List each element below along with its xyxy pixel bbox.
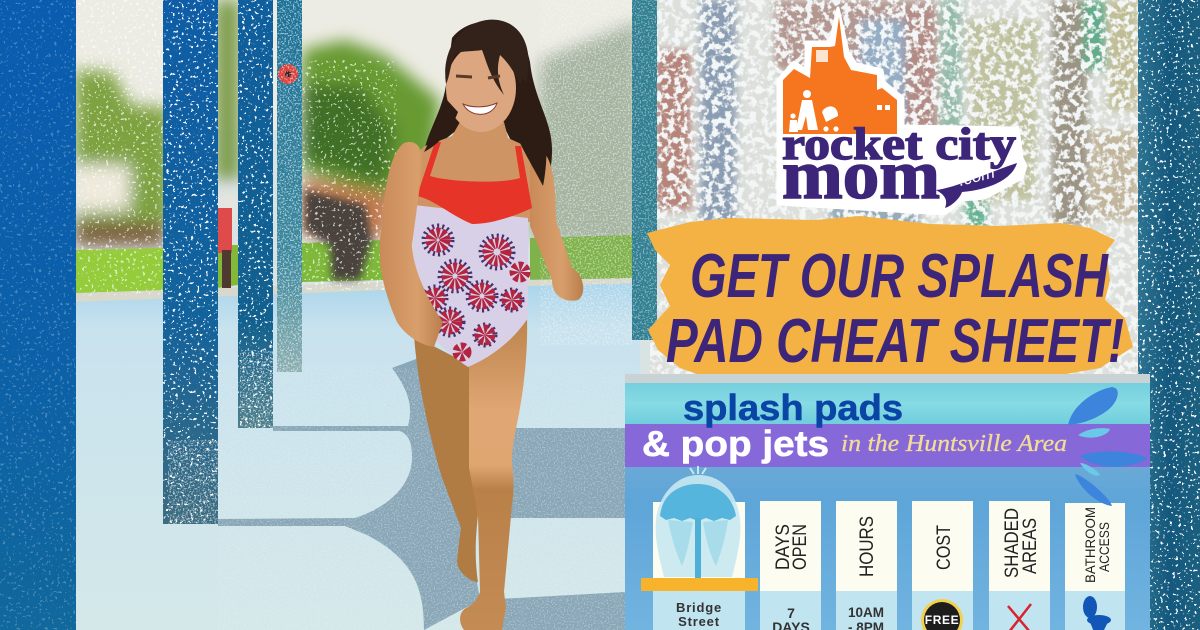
logo swoosh	[936, 163, 1017, 208]
column: cost: COST	[934, 525, 955, 570]
eyes	[456, 76, 500, 78]
logo wordmark mom: mom	[782, 137, 940, 214]
column: hours: HOURS	[857, 516, 878, 577]
face	[446, 44, 516, 132]
far leg	[414, 336, 478, 582]
column: location	[653, 502, 745, 630]
column: days open	[760, 501, 821, 630]
column: location: Bridge	[676, 600, 722, 615]
column: days open: OPEN	[790, 524, 811, 570]
column: bathroom access	[1065, 503, 1125, 630]
hair strands over shoulder	[424, 78, 546, 186]
front hair	[445, 20, 529, 95]
teal pole centre	[632, 0, 657, 340]
logo white outline	[778, 8, 1026, 214]
column: days open: 7	[787, 605, 795, 621]
grass	[76, 248, 165, 296]
background people group	[305, 190, 372, 280]
chest and shoulders	[408, 122, 542, 222]
family silhouette	[789, 50, 890, 132]
orange paint brush stroke	[647, 216, 1133, 375]
water splash drops	[1068, 387, 1148, 506]
column: shaded areas	[989, 501, 1050, 630]
left arm and hand	[380, 142, 443, 347]
smile	[463, 103, 497, 114]
purple title band	[625, 424, 1150, 467]
column: cost: FREE	[925, 613, 959, 627]
title splash pads: splash pads	[683, 387, 903, 428]
pavement shadow	[218, 350, 480, 630]
blue pole far left	[0, 0, 76, 630]
girl running	[380, 20, 583, 630]
near leg	[460, 318, 527, 630]
subtitle: in the Huntsville Area	[841, 431, 1067, 457]
pavement	[76, 280, 640, 630]
right arm	[530, 148, 583, 301]
turquoise title band	[625, 383, 1150, 425]
back hair	[424, 22, 552, 186]
fountain icon	[641, 466, 758, 591]
blue pole 3	[277, 0, 302, 372]
blue pole 2	[238, 0, 273, 428]
orange skyline	[783, 17, 897, 134]
title pop jets: & pop jets	[642, 423, 829, 464]
card background	[625, 374, 1150, 630]
swimsuit floral body	[412, 205, 528, 367]
cheat sheet card	[625, 374, 1150, 630]
column: location: Street	[678, 614, 720, 629]
headline	[666, 242, 1124, 376]
background person in red	[218, 208, 232, 288]
swimsuit floral bursts	[424, 226, 525, 356]
column: bathroom access: BATHROOM	[1082, 507, 1098, 583]
mottled splash curtain	[650, 0, 1140, 375]
column: hours	[836, 501, 897, 630]
column: cost	[912, 501, 973, 630]
red ruffle	[417, 142, 532, 224]
blue pole 1	[163, 0, 218, 524]
card top strip	[625, 374, 1150, 384]
column: days open: DAYS	[773, 524, 794, 570]
teal pole far right	[1138, 0, 1200, 630]
logo dot com: .com	[956, 163, 997, 190]
column: hours: 10AM	[848, 605, 884, 620]
logo wordmark: rocket city	[782, 118, 1016, 169]
pavement curb	[76, 278, 640, 302]
column: shaded areas: SHADED	[1002, 508, 1023, 578]
column: shaded areas: AREAS	[1020, 518, 1041, 574]
column: bathroom access: ACCESS	[1096, 522, 1112, 572]
logo: Rocket City Mom	[778, 8, 1026, 214]
